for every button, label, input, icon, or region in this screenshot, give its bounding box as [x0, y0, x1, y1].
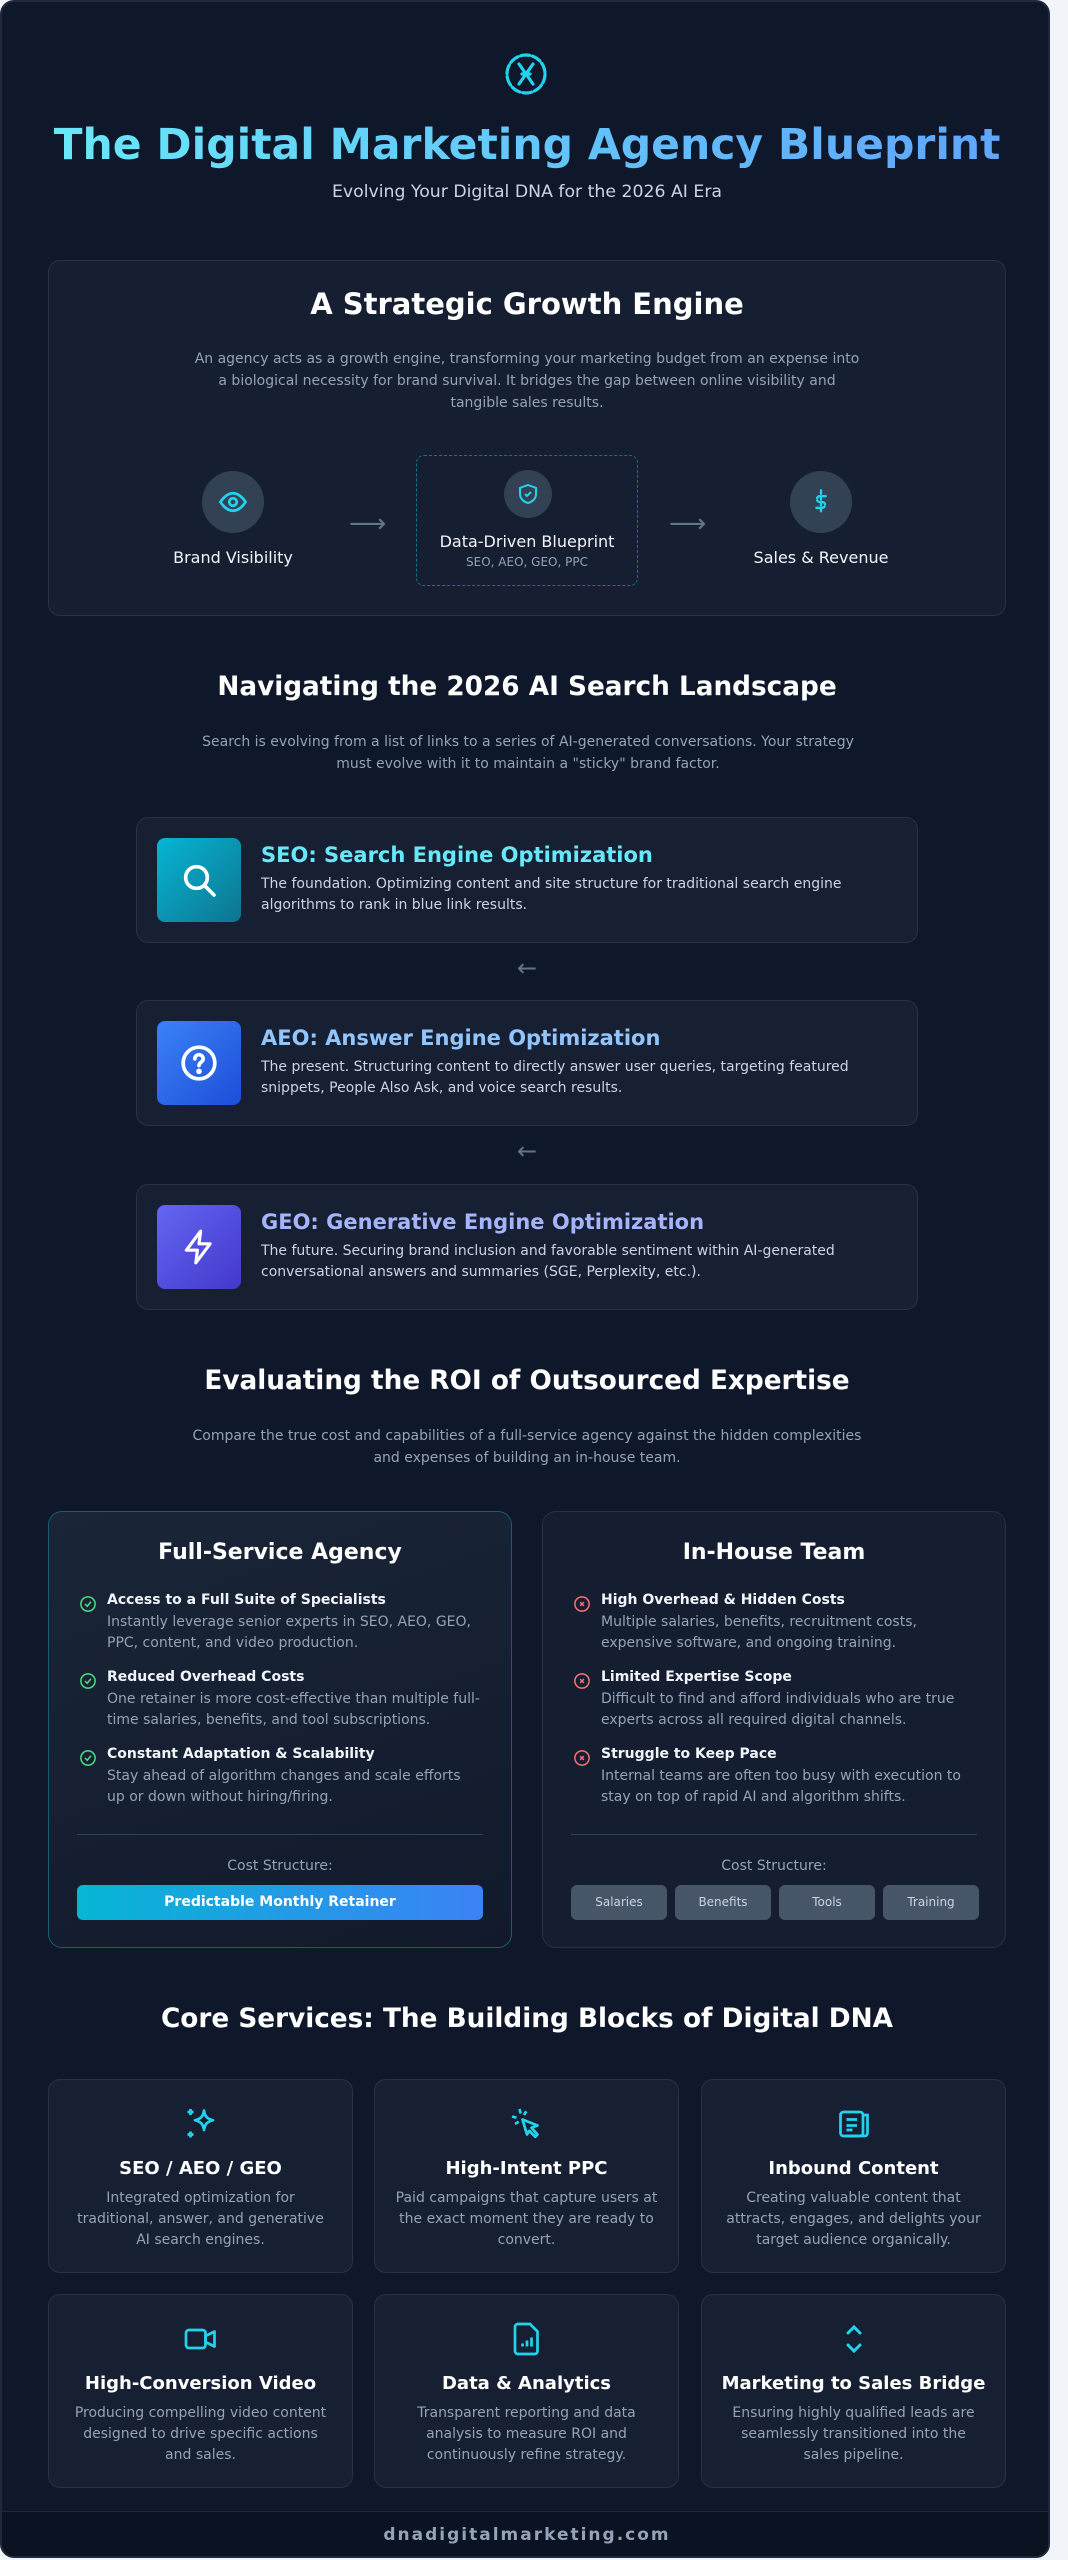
panel: full-service agency: Constant Adaptation & Scalability: [107, 1746, 375, 1762]
panel: in-house team: Struggle to Keep Pace: [601, 1746, 777, 1762]
cost pills: Tools: [812, 1895, 842, 1909]
panel: full-service agency: Instantly leverage senior experts in SEO, AEO, GEO, PPC, content, and video production.: [107, 1614, 471, 1651]
card: GEO: The future. Securing brand inclusion and favorable sentiment within AI-generated conversational answers and summaries (SGE, Perplexity, etc.).: [261, 1243, 835, 1280]
heading: AI search landscape: Navigating the 2026 AI Search Landscape: [217, 672, 837, 702]
paragraph: Compare the true cost and capabilities of a full-service agency against the hidden complexities and expenses of building an in-house team.: [193, 1428, 861, 1466]
icon: bolt: [157, 1205, 241, 1289]
panel: full-service agency: Stay ahead of algorithm changes and scale efforts up or down without hiring/firing.: [107, 1768, 461, 1805]
card: AEO: [136, 1000, 918, 1126]
cost pills: Benefits: [698, 1895, 748, 1909]
heading: ROI: Evaluating the ROI of Outsourced Expertise: [204, 1366, 850, 1396]
icon: search: [157, 838, 241, 922]
panel: in-house team: Cost Structure:: [721, 1858, 827, 1874]
service: video: High-Conversion Video: [85, 2373, 316, 2394]
service: content: Creating valuable content that attracts, engages, and delights your target audience organically.: [726, 2190, 981, 2248]
panel: in-house team: [542, 1511, 1006, 1948]
panel: full-service agency: Cost Structure:: [227, 1858, 333, 1874]
card: AEO: AEO: Answer Engine Optimization: [261, 1026, 660, 1050]
panel: in-house team: Limited Expertise Scope: [601, 1669, 792, 1685]
card: SEO: SEO: Search Engine Optimization: [261, 843, 653, 867]
icon: question: [157, 1021, 241, 1105]
card: GEO: GEO: Generative Engine Optimization: [261, 1210, 704, 1234]
cost pills: [571, 1885, 979, 1920]
card: SEO: The foundation. Optimizing content and site structure for traditional search engine algorithms to rank in blue link results.: [261, 876, 841, 913]
title: The Digital Marketing Agency Blueprint: [54, 121, 1000, 170]
card: AEO: The present. Structuring content to directly answer user queries, targeting featured snippets, People Also Ask, and voice search results.: [261, 1059, 849, 1096]
arrow: ⟶: [349, 509, 386, 539]
panel: strategic growth engine: [48, 260, 1006, 616]
panel: in-house team: Difficult to find and afford individuals who are true experts across all required digital channels.: [601, 1691, 954, 1728]
card: GEO: [136, 1184, 918, 1310]
step: data-driven blueprint: Data-Driven Blueprint: [440, 532, 614, 551]
arrow: ←: [517, 1137, 537, 1165]
cost pills: Training: [907, 1895, 955, 1909]
service: sales bridge: Ensuring highly qualified leads are seamlessly transitioned into the sales pipeline.: [732, 2405, 975, 2463]
service: content: Inbound Content: [768, 2158, 939, 2179]
logo icon: [505, 53, 547, 95]
item: [80, 1592, 471, 1651]
panel: full-service agency: One retainer is more cost-effective than multiple full-time salaries, benefits, and tool subscriptions.: [107, 1691, 480, 1728]
heading: A Strategic Growth Engine: [310, 287, 744, 321]
paragraph: An agency acts as a growth engine, transforming your marketing budget from an expense into a biological necessity for brand survival. It bridges the gap between online visibility and tangible sales results.: [195, 351, 859, 411]
subtitle: Evolving Your Digital DNA for the 2026 AI Era: [332, 182, 722, 202]
service: content: [701, 2079, 1006, 2273]
panel: in-house team: In-House Team: [683, 1540, 865, 1565]
item: [80, 1669, 480, 1728]
service: analytics: [374, 2294, 679, 2488]
panel: full-service agency: Access to a Full Suite of Specialists: [107, 1592, 386, 1608]
arrow: ⟶: [669, 509, 706, 539]
step: sales & revenue: [754, 471, 888, 567]
step: sales & revenue: Sales & Revenue: [754, 548, 888, 567]
panel: in-house team: High Overhead & Hidden Costs: [601, 1592, 845, 1608]
panel: full-service agency: Reduced Overhead Costs: [107, 1669, 304, 1685]
item: [574, 1746, 961, 1805]
step: brand visibility: Brand Visibility: [173, 548, 293, 567]
panel: in-house team: Internal teams are often too busy with execution to stay on top of rapid AI and algorithm shifts.: [601, 1768, 961, 1805]
service: sales bridge: [701, 2294, 1006, 2488]
footer: dnadigitalmarketing.com: [383, 2525, 671, 2545]
panel: full-service agency: [48, 1511, 512, 1948]
service: SEO/AEO/GEO: SEO / AEO / GEO: [119, 2158, 282, 2179]
service: SEO/AEO/GEO: [48, 2079, 353, 2273]
arrow: ←: [517, 954, 537, 982]
panel: in-house team: Multiple salaries, benefits, recruitment costs, expensive software, and ongoing training.: [601, 1614, 917, 1651]
service: video: Producing compelling video content designed to drive specific actions and sales.: [75, 2405, 326, 2463]
service: sales bridge: Marketing to Sales Bridge: [722, 2373, 985, 2394]
footer: [2, 2511, 1052, 2560]
service: video: [48, 2294, 353, 2488]
card: SEO: [136, 817, 918, 943]
step: brand visibility: [173, 471, 293, 567]
service: PPC: Paid campaigns that capture users at the exact moment they are ready to convert.: [396, 2190, 657, 2248]
item: [574, 1592, 917, 1651]
service: analytics: Data & Analytics: [442, 2373, 611, 2394]
cost pills: Salaries: [595, 1895, 643, 1909]
button: retainer: Predictable Monthly Retainer: [164, 1894, 396, 1910]
heading: core services: Core Services: The Building Blocks of Digital DNA: [161, 2004, 893, 2034]
item: [80, 1746, 461, 1805]
panel: full-service agency: Full-Service Agency: [158, 1540, 402, 1565]
step: data-driven blueprint: [416, 455, 638, 586]
service: PPC: High-Intent PPC: [445, 2158, 608, 2179]
service: SEO/AEO/GEO: Integrated optimization for traditional, answer, and generative AI search engines.: [77, 2190, 324, 2248]
paragraph: Search is evolving from a list of links to a series of AI-generated conversations. Your strategy must evolve with it to maintain a "sticky" brand factor.: [202, 734, 854, 772]
button: retainer: [77, 1885, 483, 1920]
step: data-driven blueprint: SEO, AEO, GEO, PPC: [466, 555, 588, 569]
service: PPC: [374, 2079, 679, 2273]
service: analytics: Transparent reporting and data analysis to measure ROI and continuously refine strategy.: [417, 2405, 636, 2463]
item: [574, 1669, 954, 1728]
